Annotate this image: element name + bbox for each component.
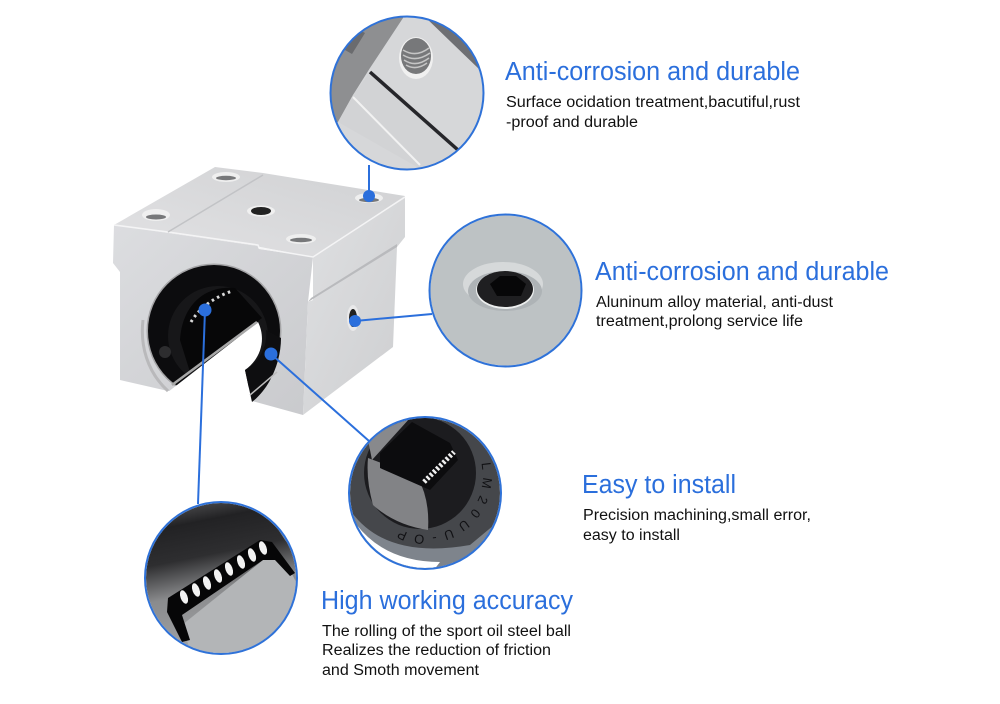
- body: rolling steel ball: and Smoth movement: [322, 662, 480, 679]
- heading: easy to install: Easy to install: [582, 471, 736, 499]
- detail circle: steel balls: [142, 500, 302, 660]
- heading: high working accuracy: High working accuracy: [321, 587, 573, 615]
- feature text: anti-corrosion 2: [595, 258, 889, 330]
- connector to seal ring detail: [264, 348, 369, 441]
- feature text: easy to install: [582, 471, 811, 544]
- body: rolling steel ball: [322, 623, 571, 679]
- body: aluminum alloy: [596, 294, 834, 330]
- top mounting holes: [142, 172, 383, 244]
- feature text: high working accuracy: [321, 587, 573, 679]
- heading: anti-corrosion 1: Anti-corrosion and durable: [505, 58, 800, 86]
- body: surface treatment: [506, 94, 801, 131]
- body: precision machining: easy to install: [583, 527, 680, 544]
- product: linear bearing block: [113, 167, 405, 415]
- body: aluminum alloy: treatment,prolong service life: [596, 313, 803, 330]
- block front face: [113, 225, 313, 415]
- body: rolling steel ball: Realizes the reduction of friction: [322, 642, 551, 659]
- connector to ball detail: [198, 304, 212, 504]
- body: precision machining: [583, 507, 811, 544]
- body: precision machining: Precision machining,small error,: [583, 507, 811, 524]
- heading: anti-corrosion 2: Anti-corrosion and durable: [595, 258, 889, 286]
- connector to top hole detail: [363, 165, 375, 202]
- body: surface treatment: -proof and durable: [506, 114, 638, 131]
- side set screw: [347, 305, 359, 331]
- detail circle: hex set screw: [428, 213, 583, 368]
- body: rolling steel ball: The rolling of the sport oil steel ball: [322, 623, 571, 640]
- detail circle: seal ring: [348, 416, 502, 570]
- bearing bore: [142, 264, 282, 415]
- body: surface treatment: Surface ocidation treatment,bacutiful,rust: [506, 94, 801, 111]
- block top face: [114, 167, 405, 257]
- connector lines and dots: [198, 165, 432, 504]
- connector to set screw detail: [349, 314, 432, 327]
- feature text: anti-corrosion 1: [505, 58, 801, 131]
- detail circle: seal ring: LM20UU-OP: [398, 462, 492, 544]
- body: aluminum alloy: Aluninum alloy material, anti-dust: [596, 294, 834, 311]
- detail circle: threaded hole: [330, 16, 484, 170]
- block side face: [303, 196, 405, 415]
